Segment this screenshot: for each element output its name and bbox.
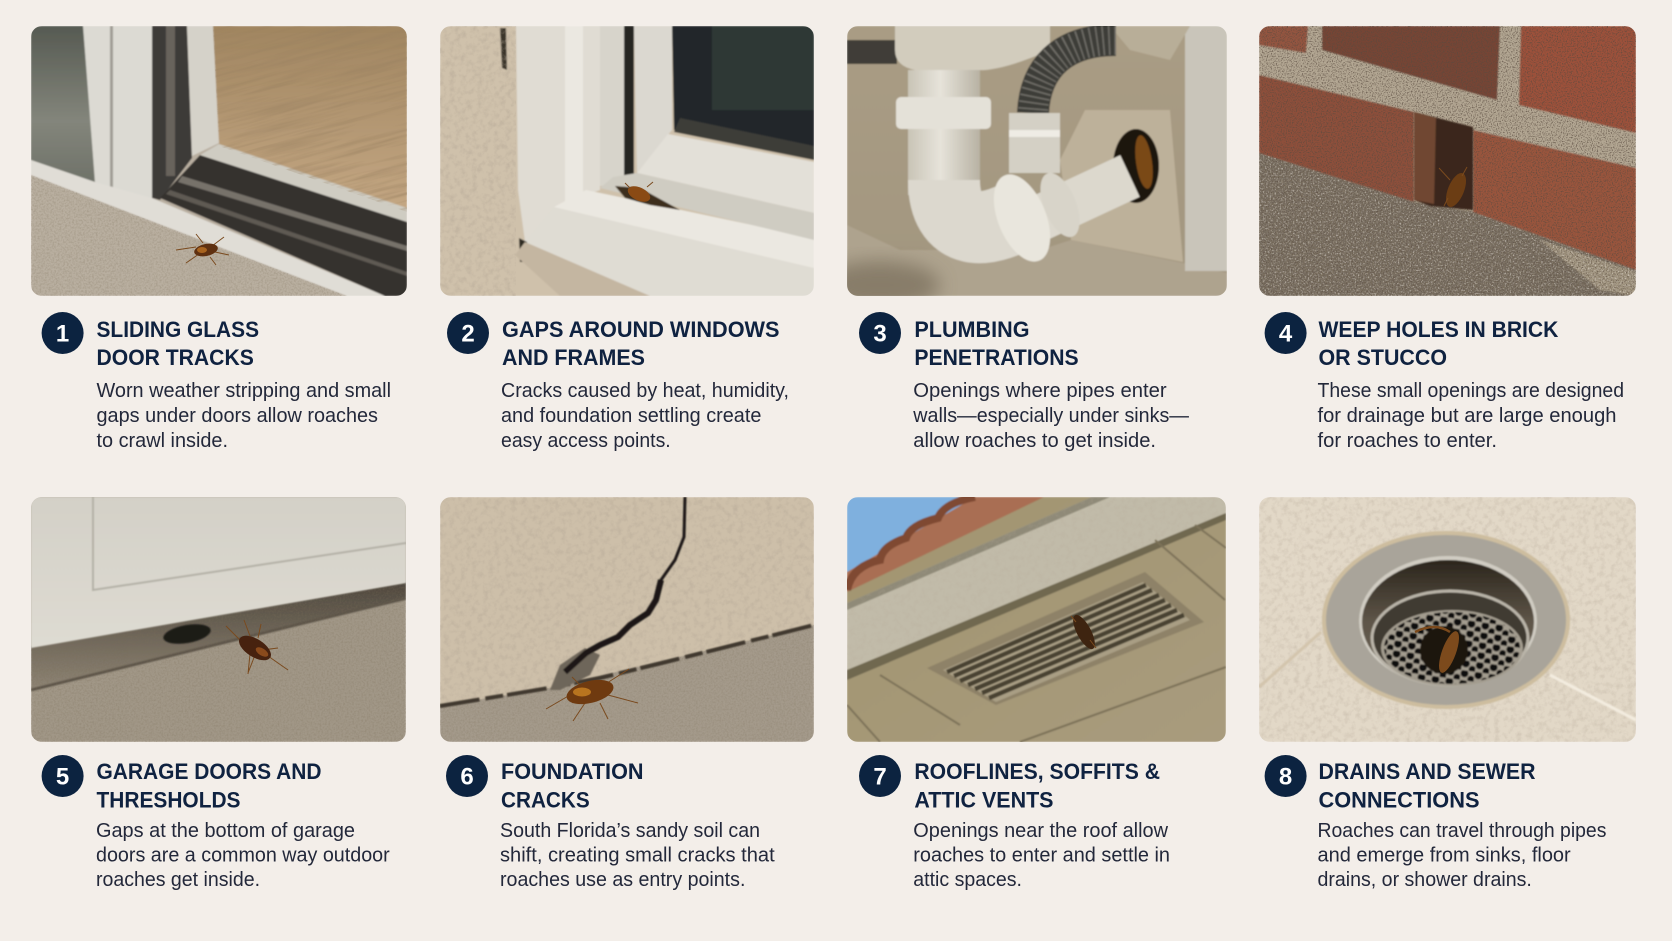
body text 3: Openings where pipes enter [913,380,1167,402]
photo: pipes under sink [847,26,1227,296]
number badge 8: 8 [1279,764,1292,790]
body text 6: South Florida’s sandy soil can [500,820,760,842]
body text 5: doors are a common way outdoor [96,844,390,866]
heading 6: CRACKS [501,788,590,812]
heading 2: AND FRAMES [502,345,645,370]
heading 3: PLUMBING [914,317,1030,342]
body text 8: drains, or shower drains. [1318,869,1532,891]
heading 8: CONNECTIONS [1318,788,1480,812]
heading 4: OR STUCCO [1318,345,1447,370]
heading 1: DOOR TRACKS [96,345,254,370]
number badge 2: 2 [461,320,475,348]
number badge 5 [42,755,84,797]
photo: soffit vent [847,497,1226,742]
icon: roach [546,669,638,721]
number badge 1: 1 [56,320,69,348]
body text 4: for roaches to enter. [1318,430,1497,452]
number badge 3 [859,312,901,354]
body text 4: for drainage but are large enough [1318,405,1616,427]
number badge 6: 6 [460,764,474,790]
heading 5: GARAGE DOORS AND [96,759,322,784]
photo: garage door gap [31,497,406,742]
body text 1: Worn weather stripping and small [96,380,391,402]
heading 7: ATTIC VENTS [914,788,1054,812]
body text 7: roaches to enter and settle in [913,844,1170,866]
icon: roach [1438,166,1468,207]
photo: window frame [440,26,814,296]
body text 7: Openings near the roof allow [913,820,1169,842]
number badge 4 [1265,312,1307,354]
body text 5: roaches get inside. [96,869,260,891]
icon: roach [625,182,653,205]
body text 1: to crawl inside. [96,430,228,452]
number badge 3: 3 [873,320,887,348]
panel 4: weep holes in brick or stucco [1259,26,1636,452]
heading 2: GAPS AROUND WINDOWS [502,317,780,342]
number badge 1 [42,312,84,354]
body text 7: attic spaces. [913,869,1022,891]
number badge 4: 4 [1279,320,1293,348]
body text 2: easy access points. [501,430,671,452]
photo: brick wall weep hole [1259,26,1636,296]
icon: roach [1415,627,1463,675]
heading 7: ROOFLINES, SOFFITS & [914,759,1160,784]
panel 8: drains and sewer connections [1259,497,1636,891]
heading 6: FOUNDATION [501,759,644,784]
number badge 2 [447,312,489,354]
photo: floor drain [1259,497,1636,742]
number badge 6 [446,755,488,797]
panel 6: foundation cracks [440,497,814,891]
icon: roach [1070,615,1096,650]
body text 3: walls—especially under sinks— [912,405,1189,427]
body text 2: Cracks caused by heat, humidity, [501,380,789,402]
heading 5: THRESHOLDS [96,788,240,812]
number badge 7: 7 [873,764,887,790]
body text 1: gaps under doors allow roaches [96,405,378,427]
heading 1: SLIDING GLASS [96,317,259,342]
panel 5: garage doors and thresholds [31,497,406,891]
heading 4: WEEP HOLES IN BRICK [1318,317,1558,342]
heading 3: PENETRATIONS [914,345,1079,370]
icon: roach [226,620,288,674]
number badge 7 [859,755,901,797]
panel 3: plumbing penetrations [820,26,1227,452]
number badge 8 [1265,755,1307,797]
body text 6: roaches use as entry points. [500,869,745,891]
icon: roach [176,234,229,265]
photo: sliding door track [31,26,407,296]
panel 1: sliding glass door tracks [31,26,407,447]
body text 8: Roaches can travel through pipes [1318,820,1606,842]
body text 6: shift, creating small cracks that [500,844,775,866]
number badge 5: 5 [56,764,69,790]
body text 8: and emerge from sinks, floor [1318,844,1571,866]
body text 5: Gaps at the bottom of garage [96,820,355,842]
panel 7: rooflines, soffits and attic vents [847,497,1226,891]
body text 4: These small openings are designed [1318,380,1624,402]
photo: cracked foundation [440,497,814,742]
panel 2: gaps around windows and frames [440,26,814,452]
body text 2: and foundation settling create [501,405,761,427]
body text 3: allow roaches to get inside. [913,430,1156,452]
heading 8: DRAINS AND SEWER [1318,759,1536,784]
